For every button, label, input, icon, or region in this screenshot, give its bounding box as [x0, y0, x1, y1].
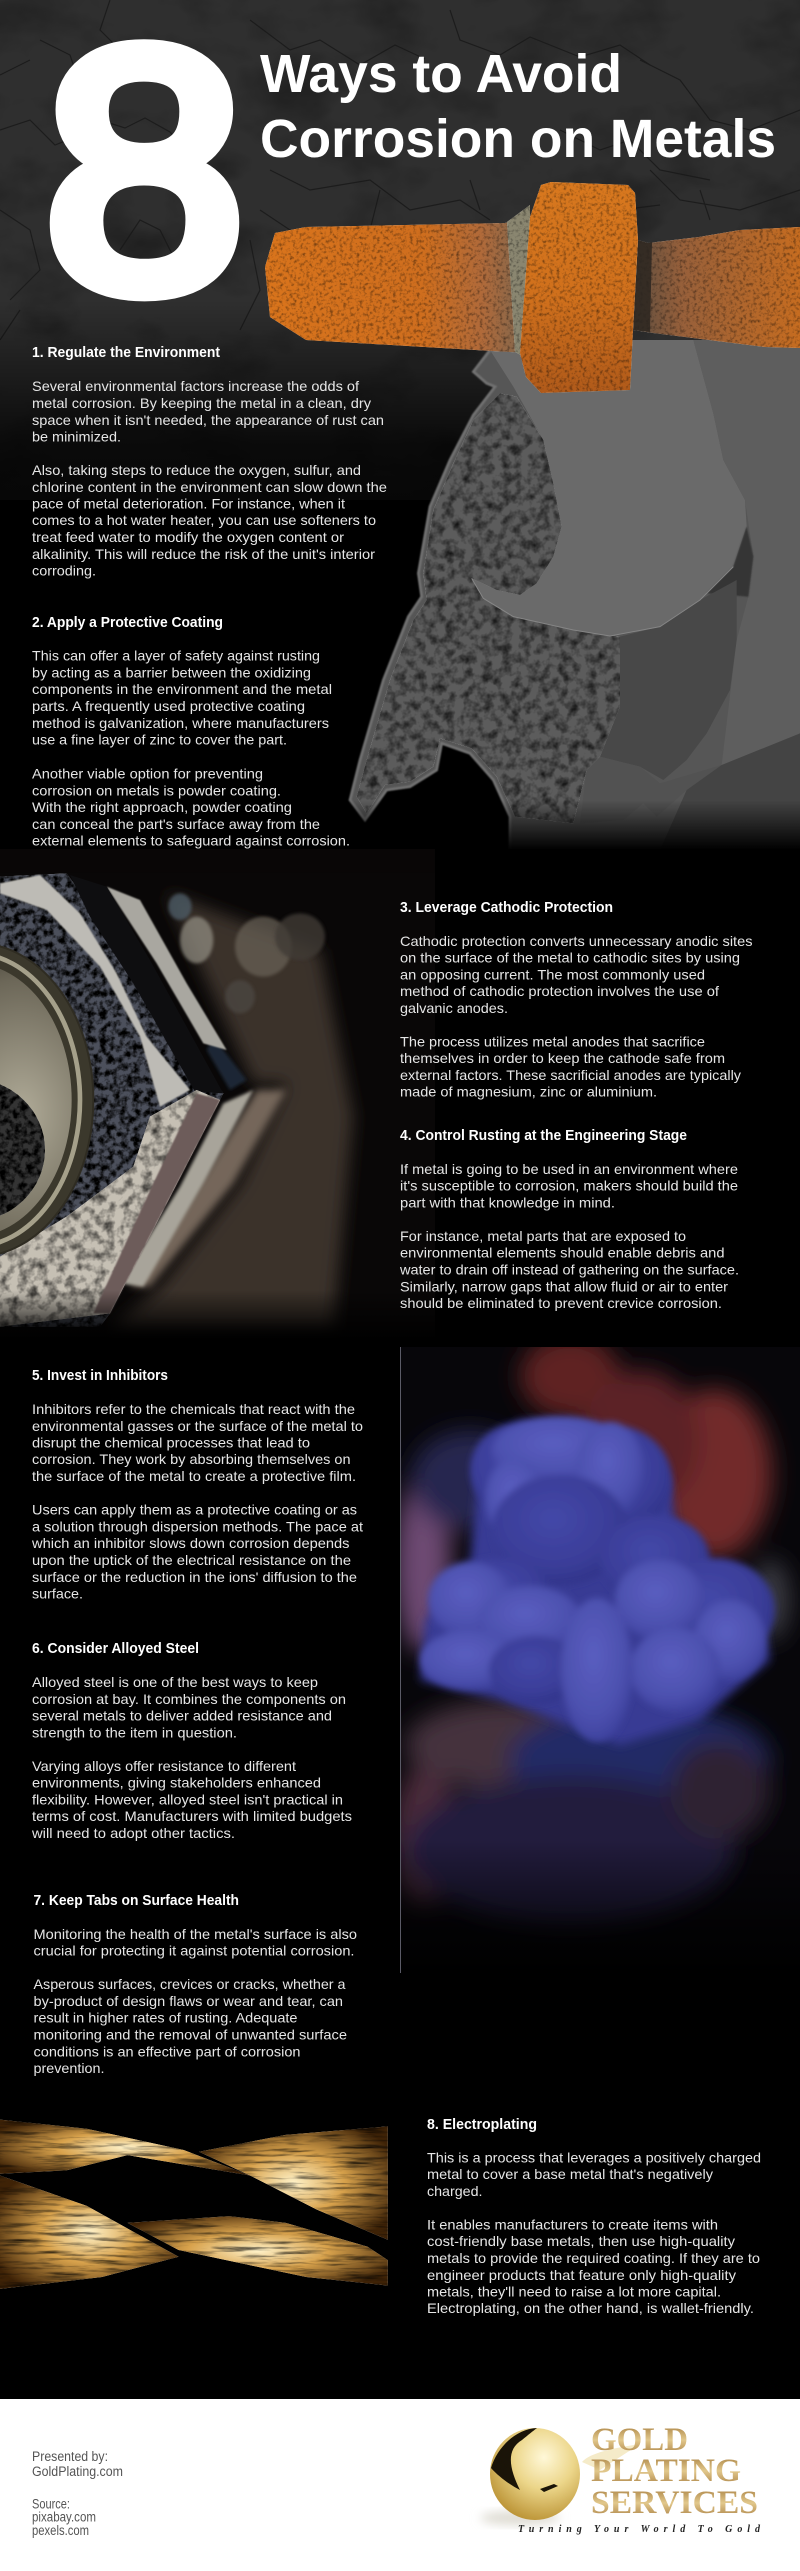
text block: step 4 body: it's susceptible to corrosion, makers should build the [400, 1178, 738, 1194]
panel: step 2 apply a protective coating [32, 615, 350, 848]
bolt shaft left [265, 217, 530, 353]
lower pale face [0, 1090, 220, 1327]
text block: step 8 body: metal to cover a base metal that's negatively [427, 2166, 713, 2182]
blue cloud lobes [420, 1416, 775, 1742]
title [260, 44, 776, 169]
text block: step 2 body: external elements to safeguard against corrosion. [32, 832, 350, 848]
text block: step 8 body: engineer products that feature only high-quality [427, 2267, 736, 2283]
heading: step 8: 8. Electroplating [427, 2117, 537, 2133]
photo: blue and red ink smoke [393, 1334, 800, 1975]
text block: step 7 body: prevention. [34, 2060, 104, 2076]
text block: step 1 body: treat feed water to modify the oxygen content or [32, 529, 344, 545]
text block: step 5 body: the surface of the metal to create a protective film. [32, 1468, 356, 1484]
blue cloud base [420, 1420, 770, 1745]
text block: step 7 body [34, 1926, 357, 2076]
text block: step 8 body: cost-friendly base metals, then use high-quality [427, 2233, 735, 2249]
heading: step 6: 6. Consider Alloyed Steel [32, 1641, 199, 1657]
icon: gold globe [480, 2428, 640, 2525]
text block: step 8 body: Electroplating, on the other hand, is wallet-friendly. [427, 2300, 754, 2316]
text block: step 2 body: corrosion on metals is powder coating. [32, 782, 281, 798]
text block: step 2 body: Another viable option for preventing [32, 766, 263, 782]
upper side reflection [107, 887, 227, 1050]
text block: step 4 body: environmental elements should enable debris and [400, 1244, 724, 1260]
footer credits [32, 2449, 123, 2538]
text block: step 2 body: use a fine layer of zinc to cover the part. [32, 732, 287, 748]
heading: step 4: 4. Control Rusting at the Engineering Stage [400, 1128, 687, 1144]
right flute [199, 2126, 388, 2240]
text block: step 4 body: For instance, metal parts that are exposed to [400, 1228, 686, 1244]
footer credits: GoldPlating.com [32, 2464, 123, 2479]
heading: step 5: 5. Invest in Inhibitors [32, 1368, 168, 1384]
text block: step 2 body: method is galvanization, where manufacturers [32, 715, 329, 731]
panel: step 8 electroplating [427, 2117, 761, 2316]
text block: step 2 body: by acting as a barrier between the oxidizing [32, 664, 311, 680]
text block: step 6 body: strength to the item in question. [32, 1724, 237, 1740]
text block: step 6 body: environments, giving stakeholders enhanced [32, 1774, 321, 1790]
logo wordmark: SERVICES [591, 2485, 758, 2521]
text block: step 1 body [32, 378, 387, 578]
text block: step 4 body: water to drain off instead of gathering on the surface. [399, 1262, 739, 1278]
centre flute [128, 2216, 388, 2286]
text block: step 7 body: Asperous surfaces, crevices or cracks, whether a [34, 1976, 346, 1992]
panel: step 1 regulate the environment [32, 345, 387, 578]
text block: step 7 body: Monitoring the health of the metal's surface is also [34, 1926, 357, 1942]
text block: step 3 body: galvanic anodes. [400, 1000, 508, 1016]
text block: step 2 body: With the right approach, powder coating [32, 799, 292, 815]
logo wordmark [591, 2422, 758, 2521]
text block: step 1 body: metal corrosion. By keeping the metal in a clean, dry [32, 395, 371, 411]
photo: steel hex nut [0, 849, 435, 1340]
text block: step 8 body: This is a process that leverages a positively charged [427, 2150, 761, 2166]
text block: step 5 body: Inhibitors refer to the chemicals that react with the [32, 1401, 355, 1417]
collar highlight [0, 953, 80, 1247]
text block: step 1 body: pace of metal deterioration. For instance, when it [32, 496, 345, 512]
peel shadow crease [472, 567, 733, 636]
text block: step 3 body: Cathodic protection converts unnecessary anodic sites [400, 933, 752, 949]
heading: step 1: 1. Regulate the Environment [32, 345, 220, 361]
text block: step 3 body: made of magnesium, zinc or aluminium. [400, 1084, 657, 1100]
light peel crescent [472, 340, 747, 636]
bottom fade [0, 1290, 435, 1340]
text block: step 1 body: alkalinity. This will reduce the risk of the unit's interior [32, 546, 375, 562]
inner bore [0, 963, 72, 1237]
text block: step 1 body: Several environmental factors increase the odds of [32, 378, 359, 394]
side reflection [120, 1090, 253, 1287]
text block: step 6 body: Varying alloys offer resistance to different [32, 1758, 296, 1774]
panel: step 5 invest in inhibitors [31, 1368, 363, 1602]
text block: step 6 body: flexibility. However, alloyed steel isn't practical in [32, 1792, 343, 1808]
text block: step 4 body: should be eliminated to prevent crevice corrosion. [400, 1295, 722, 1311]
text block: step 1 body: Also, taking steps to reduce the oxygen, sulfur, and [32, 462, 361, 478]
peeling metal image [340, 340, 800, 850]
heading: step 3: 3. Leverage Cathodic Protection [400, 900, 613, 916]
text block: step 6 body [31, 1674, 352, 1841]
text block: step 5 body: surface or the reduction in the ions' diffusion to the [32, 1569, 357, 1585]
text block: step 5 body: surface. [32, 1586, 83, 1602]
footer credits: Presented by: [32, 2449, 108, 2464]
lower left flute [0, 2175, 179, 2289]
title: Corrosion on Metals [260, 109, 776, 169]
purple edge [93, 1093, 220, 1313]
footer credits: pexels.com [32, 2523, 89, 2538]
panel: step 4 control rusting at the engineering stage [399, 1128, 739, 1311]
darker exposed patch [600, 580, 737, 780]
logo wordmark: PLATING [591, 2453, 741, 2489]
text block: step 3 body: an opposing current. The most commonly used [400, 966, 705, 982]
text block: step 3 body: The process utilizes metal anodes that sacrifice [400, 1034, 705, 1050]
bright band [0, 875, 190, 1107]
text block: step 3 body: themselves in order to keep the cathode safe from [400, 1050, 725, 1066]
text block: step 5 body: environmental gasses or the surface of the metal to [32, 1418, 363, 1434]
weathered collar [507, 205, 530, 360]
heading: step 7: 7. Keep Tabs on Surface Health [34, 1893, 239, 1909]
red plumes and haze [393, 1334, 790, 1925]
panel: step 7 keep tabs on surface health [34, 1893, 357, 2076]
bolt flange [520, 182, 638, 393]
text block: step 1 body: space when it isn't needed, the appearance of rust can [32, 412, 384, 428]
mottled corroded surface [357, 393, 620, 823]
cracked dark texture background [0, 0, 800, 860]
text block: step 8 body [427, 2150, 761, 2316]
heading: step 2: 2. Apply a Protective Coating [32, 615, 223, 631]
thin rule left of smoke photo [400, 1347, 401, 1973]
text block: step 6 body: corrosion at bay. It combines the components on [32, 1691, 346, 1707]
under peel shadow [707, 527, 753, 597]
footer credits: pixabay.com [32, 2510, 96, 2524]
text block: step 2 body: can conceal the part's surface away from the [32, 816, 320, 832]
bolt shaft right [633, 227, 800, 348]
text block: step 1 body: chlorine content in the environment can slow down the [32, 479, 387, 495]
backdrop stripe [130, 1090, 287, 1287]
text block: step 7 body: result in higher rates of rusting. Adequate [34, 2010, 298, 2026]
text block: step 1 body: be minimized. [32, 428, 121, 444]
photo: gold plated drill bit [0, 2120, 388, 2289]
text block: step 8 body: charged. [427, 2183, 482, 2199]
text block: step 4 body: Similarly, narrow gaps that allow fluid or air to enter [400, 1278, 728, 1294]
text block: step 5 body: which an inhibitor slows down corrosion depends [31, 1535, 350, 1551]
text block: step 7 body: crucial for protecting it against potential corrosion. [34, 1942, 354, 1958]
logo tagline: Turning Your World To Gold [518, 2524, 761, 2535]
panel: step 3 leverage cathodic protection [400, 900, 752, 1100]
blurred backdrop reflections [110, 893, 353, 1330]
text block: step 5 body: corrosion. They work by absorbing themselves on [32, 1451, 350, 1467]
lower flake [586, 756, 600, 770]
text block: step 2 body: parts. A frequently used protective coating [32, 698, 305, 714]
upper left flute [0, 2120, 250, 2175]
text block: step 6 body: several metals to deliver added resistance and [32, 1708, 332, 1724]
logo: gold plating services [480, 2422, 761, 2535]
text block: step 7 body: by-product of design flaws or wear and tear, can [34, 1993, 343, 2009]
text block: step 5 body [31, 1401, 363, 1602]
collar ring [0, 943, 93, 1257]
text block: step 4 body [399, 1161, 739, 1311]
text block: step 2 body: This can offer a layer of safety against rusting [32, 648, 320, 664]
text block: step 8 body: metals, they'll need to raise a lot more capital. [427, 2284, 721, 2300]
text block: step 3 body [400, 933, 752, 1100]
hex dark chamfer [70, 875, 223, 1093]
bottom fade [401, 1840, 800, 1975]
text block: step 5 body: a solution through dispersion methods. The pace at [32, 1518, 363, 1534]
hex face [0, 873, 223, 1327]
rusted metal bolt image [265, 182, 800, 393]
text block: step 1 body: comes to a hot water heater, you can use softeners to [32, 512, 376, 528]
top fade [0, 849, 435, 872]
text block: step 2 body [32, 648, 350, 848]
shaft shading right [633, 240, 652, 332]
hole thread [0, 1078, 45, 1222]
text block: step 4 body: part with that knowledge in mind. [400, 1194, 615, 1210]
text block: step 8 body: It enables manufacturers to create items with [427, 2216, 718, 2232]
text block: step 8 body: metals to provide the required coating. If they are to [427, 2250, 760, 2266]
text block: step 6 body: Alloyed steel is one of the best ways to keep [32, 1674, 318, 1690]
text block: step 1 body: corroding. [32, 562, 96, 578]
text block: step 7 body: monitoring and the removal of unwanted surface [34, 2026, 347, 2042]
footer band [0, 2399, 800, 2571]
bottom fade [352, 804, 800, 849]
text block: step 4 body: If metal is going to be used in an environment where [400, 1161, 738, 1177]
text block: step 6 body: terms of cost. Manufacturers with limited budgets [32, 1808, 352, 1824]
right bottom shade [668, 734, 800, 834]
text block: step 6 body: will need to adopt other tactics. [31, 1825, 235, 1841]
text block: step 3 body: method of cathodic protection involves the use of [400, 983, 719, 999]
logo wordmark: GOLD [591, 2422, 688, 2458]
text block: step 3 body: external factors. These sacrificial anodes are typically [400, 1067, 741, 1083]
panel: step 6 consider alloyed steel [31, 1641, 352, 1841]
text block: step 5 body: Users can apply them as a protective coating or as [32, 1502, 357, 1518]
right metal surface [694, 340, 800, 734]
peel silhouette [348, 340, 754, 846]
bokeh highlights [168, 893, 325, 1090]
text block: step 7 body: conditions is an effective part of corrosion [34, 2044, 300, 2060]
footer credits: Source: [32, 2496, 70, 2512]
title: Ways to Avoid [260, 44, 622, 104]
text block: step 2 body: components in the environment and the metal [32, 681, 332, 697]
text block: step 5 body: upon the uptick of the electrical resistance on the [32, 1552, 351, 1568]
text block: step 5 body: disrupt the chemical processes that lead to [32, 1434, 310, 1450]
text block: step 3 body: on the surface of the metal to cathodic sites by using [400, 950, 740, 966]
